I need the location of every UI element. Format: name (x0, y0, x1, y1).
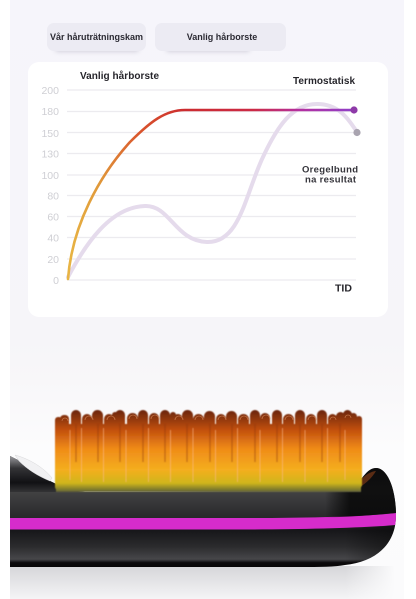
floor reflection (10, 566, 404, 599)
label: ordinary hairbrush: Vanlig hårborste (80, 70, 159, 82)
y-axis labels: 130 (41, 148, 59, 160)
magenta stripe (10, 513, 396, 530)
y-axis labels: 180 (41, 106, 59, 118)
panel: chart card (28, 62, 388, 317)
end marker: purple (350, 106, 358, 114)
y-axis labels: 80 (47, 190, 59, 202)
y-axis labels: 60 (47, 212, 59, 224)
illustration: heated brush (10, 410, 396, 568)
tab: our hair straightening comb (47, 23, 146, 51)
y-axis labels: 200 (41, 85, 59, 97)
bristle tip highlights (62, 415, 351, 421)
y-axis labels: 100 (41, 170, 59, 182)
chart gridlines (67, 90, 356, 280)
y-axis labels: 150 (41, 128, 59, 140)
y-axis labels: 20 (47, 254, 59, 266)
white highlight on left shoulder (15, 455, 52, 481)
y-axis labels: 0 (53, 275, 59, 287)
tab: ordinary hairbrush: Vanlig hårborste (187, 32, 257, 42)
tab: ordinary hairbrush (155, 23, 286, 51)
curve: ordinary brush irregular temperature (68, 104, 361, 277)
brush body (10, 455, 396, 568)
label: irregular results: na resultat (305, 174, 357, 186)
curve: thermostatic temperature (68, 106, 358, 279)
y-axis labels: 40 (47, 232, 59, 244)
bristle highlights (70, 428, 345, 482)
bristle dark separations (76, 424, 340, 462)
label: thermostatic: Termostatisk (293, 76, 355, 87)
bristles (55, 410, 362, 492)
tab: our hair straightening comb: Vår håruträtningskam (50, 32, 143, 42)
label: time axis: TID (335, 282, 352, 294)
end marker: grey (353, 129, 361, 136)
y-axis labels (41, 85, 59, 287)
label: irregular results: Oregelbund (302, 164, 358, 176)
